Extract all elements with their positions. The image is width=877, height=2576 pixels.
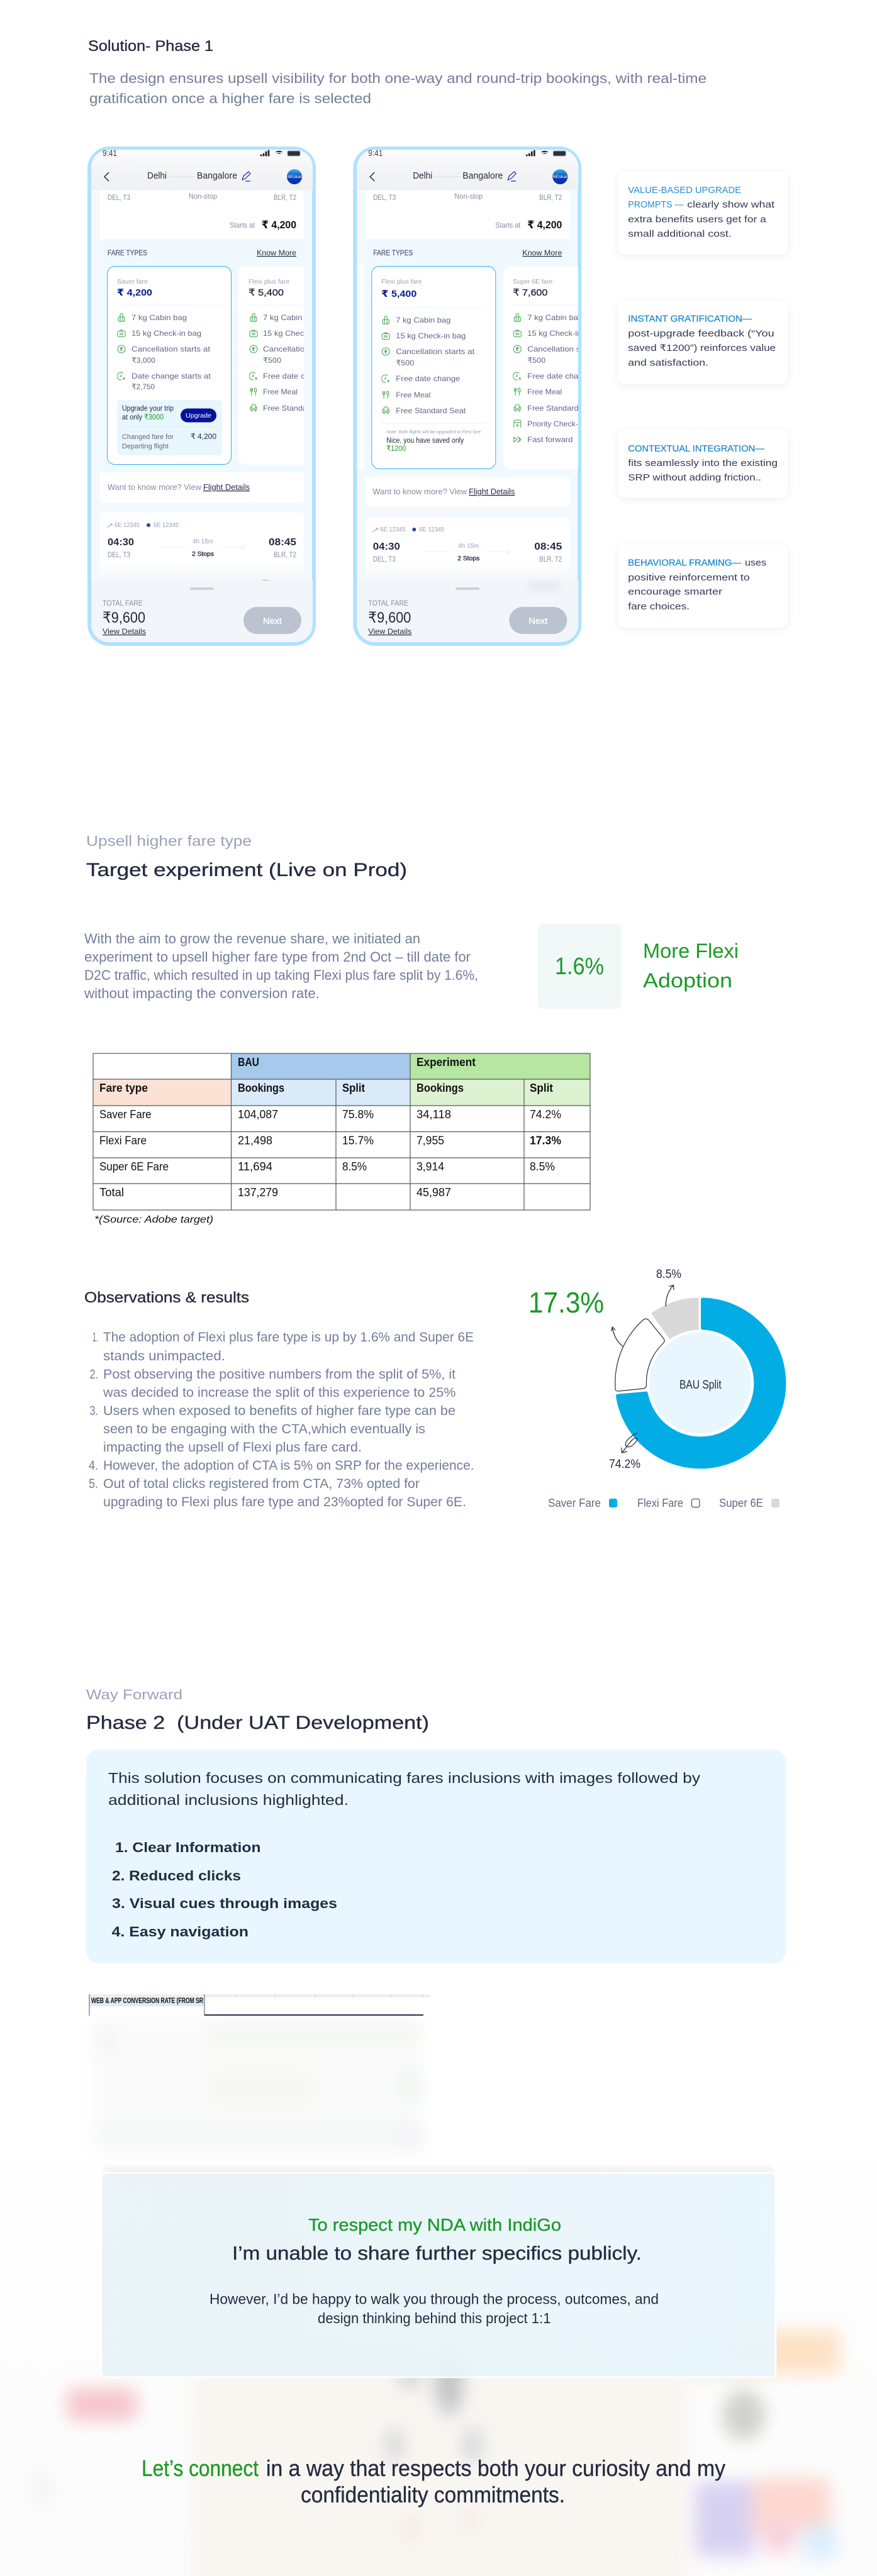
- fare card: saver: ₹2,750: [131, 382, 155, 391]
- NDA headline: To respect my NDA with IndiGo: [308, 2215, 561, 2235]
- fare card: super 6E (partly visible): Free date change: [527, 372, 593, 380]
- chart centre label: [649, 1332, 751, 1434]
- flight summary card: BLR, T2: [274, 193, 296, 202]
- numbered list: observations: 3.: [89, 1403, 98, 1418]
- phone header: 9:41: [103, 148, 117, 158]
- stat card: 1.6% more flexi adoption: 1.6%: [555, 953, 604, 980]
- table: BAU vs experiment fare split: Experiment: [416, 1056, 476, 1069]
- arrow: to flexi label: [612, 1327, 623, 1346]
- fare card: flexi plus (partly visible): Free Standard Seat: [263, 404, 333, 413]
- flight option card: 08:45: [534, 541, 562, 552]
- table: BAU vs experiment fare split: 8.5%: [342, 1160, 367, 1173]
- fare card: saver: ₹ 4,200: [117, 287, 152, 298]
- flight details link card: [100, 472, 304, 503]
- flight summary card: Starts at: [495, 221, 521, 230]
- flight summary card: Starts at: [230, 221, 255, 230]
- callout: behavioral framing: [618, 545, 788, 628]
- upgrade prompt: at only: [122, 414, 142, 421]
- callout: contextual integration: SRP without adding friction..: [628, 473, 761, 483]
- fare card: flexi plus selected: Flexi plus fare: [381, 278, 422, 286]
- text block: solution intro: gratification once a higher fare is selected: [89, 91, 371, 106]
- table: BAU vs experiment fare split: BAU: [238, 1056, 259, 1069]
- fare card: saver: Saver fare: [117, 278, 148, 286]
- fare card: flexi plus selected: [372, 267, 496, 469]
- fare card: saver: Cancellation starts at: [131, 345, 211, 353]
- phone header: Bangalore: [462, 170, 503, 181]
- callout: value-based upgrade prompts: PROMPTS —: [628, 200, 684, 210]
- upgrade prompt: Changed fare for: [122, 433, 174, 441]
- flight option card: 6E 12345: [154, 522, 179, 529]
- panel numbered list: 2. Reduced clicks: [112, 1868, 241, 1884]
- chart value: saver 74.2%: 74.2%: [609, 1458, 640, 1471]
- flight option card: 2 Stops: [192, 551, 214, 558]
- callout: value-based upgrade prompts: extra benefits users get for a: [628, 215, 767, 225]
- fare card: flexi plus (partly visible): ₹ 5,400: [249, 287, 284, 298]
- bottom sheet: total fare: TOTAL FARE: [103, 599, 143, 608]
- flight option card: 6E 12345: [380, 526, 406, 533]
- callout: behavioral framing: uses: [745, 558, 766, 569]
- table: BAU vs experiment fare split: 11,694: [238, 1160, 272, 1173]
- closing statement: confidentiality commitments.: [301, 2482, 565, 2507]
- table: conversion rate (mostly blurred): [89, 1994, 430, 2155]
- blurred table body: [94, 2020, 422, 2155]
- eyebrow: way forward: Way Forward: [86, 1687, 182, 1702]
- savings feedback: ₹1200: [386, 444, 406, 453]
- upgrade prompt: Departing flight: [122, 443, 169, 450]
- numbered list: observations: 5.: [89, 1476, 98, 1491]
- fare card: flexi plus (partly visible): Cancellation starts at: [263, 345, 342, 353]
- flight summary card: Non-stop: [189, 192, 217, 201]
- flight summary card: [100, 191, 304, 239]
- table: BAU vs experiment fare split: Fare type: [99, 1082, 148, 1094]
- fare types section: FARE TYPES: [373, 250, 413, 257]
- callout: value-based upgrade prompts: clearly show what: [687, 200, 774, 210]
- callout: instant gratification: post-upgrade feedback (“You: [628, 329, 774, 339]
- eyebrow: upsell higher fare type: Upsell higher fare type: [86, 833, 252, 849]
- phone mockup: flexi plus selected: [355, 148, 606, 644]
- fare card: flexi plus selected: ₹ 5,400: [381, 289, 416, 299]
- callout: instant gratification: [618, 301, 788, 384]
- table: BAU vs experiment fare split: 104,087: [238, 1108, 278, 1121]
- closing statement: Let’s connect: [142, 2455, 259, 2481]
- fare types section: FARE TYPES: [108, 250, 147, 257]
- panel description: additional inclusions highlighted.: [108, 1792, 349, 1808]
- table source note: *(Source: Adobe target): [94, 1214, 213, 1225]
- phone header: Bangalore: [197, 170, 237, 181]
- numbered list: observations: However, the adoption of CTA is 5% on SRP for the experience.: [103, 1458, 474, 1473]
- table: BAU vs experiment fare split: 74.2%: [530, 1108, 561, 1121]
- flight option card: 08:45: [269, 537, 296, 548]
- chart legend: Flexi Fare: [637, 1497, 683, 1509]
- table: BAU vs experiment fare split: 8.5%: [530, 1160, 555, 1173]
- NDA invitation: [209, 2290, 659, 2326]
- table: BAU vs experiment fare split: 15.7%: [342, 1135, 374, 1147]
- text block: experiment description: without impacting the conversion rate.: [84, 985, 320, 1001]
- fare card: flexi plus selected: Free Meal: [396, 391, 430, 399]
- fare card: flexi plus (partly visible): Free Meal: [263, 387, 298, 396]
- fare card: saver: 7 kg Cabin bag: [131, 313, 187, 322]
- NDA statement: I’m unable to share further specifics publicly.: [232, 2242, 642, 2264]
- panel shadow: [104, 2167, 773, 2175]
- fare card: flexi plus selected: Free Standard Seat: [396, 406, 466, 415]
- flight option card: 2 Stops: [457, 555, 479, 562]
- text block: experiment description: D2C traffic, which resulted in up taking Flexi plus fare split by 1.6%,: [84, 967, 478, 983]
- numbered list: observations: 4.: [89, 1458, 98, 1473]
- fare card: flexi plus selected: Free date change: [396, 374, 461, 383]
- flight summary card: ₹ 4,200: [527, 219, 562, 231]
- fare card: flexi plus selected: ₹500: [396, 358, 415, 367]
- callout: behavioral framing: fare choices.: [628, 602, 690, 612]
- fare card: flexi plus selected: 7 kg Cabin bag: [396, 316, 450, 325]
- fare card: flexi plus selected: Cancellation starts at: [396, 347, 475, 356]
- arrow: to super 6E label: [666, 1285, 674, 1306]
- bottom sheet: total fare: ₹9,600: [368, 609, 411, 626]
- numbered list: observations: 2.: [89, 1367, 98, 1382]
- table: BAU vs experiment fare split: Flexi Fare: [99, 1135, 147, 1147]
- bottom sheet: total fare: View Details: [103, 627, 146, 636]
- fare types section: Know More: [257, 250, 296, 257]
- phone header: [91, 148, 313, 190]
- background: blurred project image: [32, 2330, 840, 2576]
- flight option card: BLR, T2: [539, 555, 562, 564]
- fare card: super 6E (partly visible): ₹500: [527, 356, 546, 365]
- flight option card: 04:30: [373, 541, 400, 552]
- fare card: flexi plus (partly visible): 15 kg Check-in bag: [263, 329, 333, 338]
- fare types section: [107, 250, 304, 465]
- fare card: super 6E (partly visible): Free Standard Seat: [527, 404, 598, 413]
- callout: instant gratification: INSTANT GRATIFICATION—: [628, 314, 752, 325]
- upgrade prompt: ₹ 4,200: [191, 432, 216, 441]
- panel: NDA notice: [101, 2173, 776, 2377]
- fare types section: Know More: [522, 250, 562, 257]
- fare card: flexi plus (partly visible): 7 kg Cabin bag: [263, 313, 318, 322]
- callout: contextual integration: CONTEXTUAL INTEGRATION—: [628, 444, 764, 454]
- flight option card: 4h 15m: [193, 538, 213, 545]
- fare card: flexi plus selected: 15 kg Check-in bag: [396, 331, 466, 340]
- callout: behavioral framing: encourage smarter: [628, 587, 722, 597]
- closing statement: [142, 2455, 725, 2507]
- savings feedback: Nice, you have saved only: [386, 437, 464, 445]
- flight option card: ₹ 5,000: [262, 579, 296, 591]
- fare card: flexi plus (partly visible): ₹500: [263, 356, 281, 365]
- table: BAU vs experiment fare split: 137,279: [238, 1186, 278, 1199]
- table: BAU vs experiment fare split: [93, 1053, 590, 1210]
- bottom sheet: total fare: TOTAL FARE: [368, 599, 408, 608]
- callout: instant gratification: and satisfaction.: [628, 358, 708, 369]
- numbered list: observations: [89, 1330, 474, 1509]
- fare card: super 6E (partly visible): Cancellation starts at: [527, 345, 606, 353]
- fare card: flexi plus (partly visible): Flexi plus fare: [249, 278, 289, 286]
- segment: saver fare: [618, 1299, 784, 1467]
- panel numbered list: 1. Clear Information: [115, 1840, 260, 1855]
- callout: value-based upgrade prompts: [618, 172, 788, 255]
- numbered list: observations: stands unimpacted.: [103, 1348, 225, 1363]
- upgrade prompt: [117, 400, 222, 455]
- flight option card: [100, 513, 304, 591]
- segment: flexi fare: [615, 1319, 664, 1391]
- callout: value-based upgrade prompts: small additional cost.: [628, 229, 732, 239]
- chart centre label: BAU Split: [679, 1379, 722, 1392]
- bottom sheet: total fare: Next: [263, 616, 282, 626]
- bottom sheet: total fare: [91, 580, 313, 642]
- fare card: super 6E (partly visible): Free Meal: [527, 387, 562, 396]
- fare card: saver: Date change starts at: [131, 372, 211, 380]
- flight summary card: DEL, T3: [373, 193, 396, 202]
- numbered list: observations: Users when exposed to benefits of higher fare type can be: [103, 1403, 455, 1418]
- panel numbered list: 4. Easy navigation: [112, 1924, 249, 1940]
- panel: phase 2 summary: [86, 1750, 786, 1963]
- savings feedback: Note: Both flights will be upgraded to Flexi fare: [386, 429, 481, 435]
- numbered list: observations: Out of total clicks registered from CTA, 73% opted for: [103, 1476, 420, 1491]
- numbered list: observations: seen to be engaging with the CTA,which eventually is: [103, 1421, 425, 1436]
- segment: super 6E: [654, 1299, 697, 1337]
- chart legend: [548, 1497, 779, 1509]
- numbered list: observations: The adoption of Flexi plus fare type is up by 1.6% and Super 6E: [103, 1330, 474, 1345]
- flight summary card: DEL, T3: [108, 193, 130, 202]
- callout: contextual integration: fits seamlessly into the existing: [628, 458, 778, 469]
- NDA invitation: However, I’d be happy to walk you through the process, outcomes, and: [209, 2290, 659, 2307]
- phone header: Delhi: [147, 170, 167, 181]
- phone header: Delhi: [413, 170, 432, 181]
- upgrade prompt: Upgrade: [186, 412, 211, 419]
- heading: observations and results: Observations & results: [84, 1289, 249, 1306]
- chart legend: Super 6E: [719, 1497, 763, 1509]
- text block: solution intro: [89, 70, 707, 106]
- closing statement: in a way that respects both your curiosity and my: [266, 2455, 725, 2481]
- fare card: super 6E (partly visible): [503, 266, 578, 469]
- text block: experiment description: experiment to upsell higher fare type from 2nd Oct – till date for: [84, 949, 471, 965]
- panel numbered list: 3. Visual cues through images: [112, 1896, 337, 1911]
- chart value: super 6E 8.5%: 8.5%: [656, 1268, 681, 1281]
- fare card: super 6E (partly visible): 15 kg Check-in bag: [527, 329, 597, 338]
- fare card: super 6E (partly visible): Fast forward: [527, 435, 573, 444]
- numbered list: observations: impacting the upsell of Flexi plus fare card.: [103, 1440, 362, 1455]
- arrow: to saver label: [622, 1433, 637, 1453]
- table: BAU vs experiment fare split: 17.3%: [530, 1135, 561, 1147]
- background: page tint behind footer: [0, 2138, 877, 2576]
- numbered list: observations: 1.: [92, 1330, 98, 1345]
- text block: solution intro: The design ensures upsell visibility for both one-way and round-trip bookings, with real-time: [89, 70, 707, 86]
- flight summary card: BLR, T2: [539, 193, 562, 202]
- heading: Solution Phase 1: Solution- Phase 1: [88, 38, 213, 55]
- callout: behavioral framing: positive reinforcement to: [628, 573, 750, 583]
- table: BAU vs experiment fare split: Split: [530, 1082, 553, 1094]
- numbered list: observations: Post observing the positive numbers from the split of 5%, it: [103, 1367, 455, 1382]
- table: conversion rate (mostly blurred): WEB & APP CONVERSION RATE (FROM SR: [91, 1996, 203, 2005]
- flight summary card: [366, 191, 569, 239]
- bottom sheet: total fare: [357, 580, 578, 642]
- callout: instant gratification: saved ₹1200”) reinforces value: [628, 343, 776, 353]
- flight option card: DEL, T3: [373, 555, 396, 564]
- stat card: 1.6% more flexi adoption: Adoption: [643, 969, 732, 992]
- table: BAU vs experiment fare split: 21,498: [238, 1135, 272, 1147]
- bottom sheet: total fare: View Details: [368, 627, 411, 636]
- panel numbered list: [112, 1840, 337, 1940]
- fare card: super 6E (partly visible): 7 kg Cabin bag: [527, 313, 583, 322]
- stat card: 1.6% more flexi adoption: [538, 924, 739, 1009]
- NDA invitation: design thinking behind this project 1:1: [318, 2310, 551, 2326]
- text block: experiment description: [84, 931, 478, 1001]
- flight details link card: Want to know more? View: [372, 487, 467, 496]
- fare card: flexi plus (partly visible): Free date change: [263, 372, 328, 380]
- phone header: 6Eskai: [553, 175, 567, 179]
- fare card: saver: ₹3,000: [131, 356, 155, 365]
- flight details link card: [366, 477, 569, 507]
- flight details link card: Want to know more? View: [108, 483, 202, 492]
- numbered list: observations: was decided to increase the split of this experience to 25%: [103, 1385, 455, 1400]
- text block: experiment description: With the aim to grow the revenue share, we initiated an: [84, 931, 420, 947]
- numbered list: observations: upgrading to Flexi plus fare type and 23%opted for Super 6E.: [103, 1494, 466, 1509]
- panel description: This solution focuses on communicating fares inclusions with images followed by: [108, 1770, 701, 1786]
- table: BAU vs experiment fare split: Total: [99, 1186, 124, 1199]
- heading: target experiment: Target experiment (Live on Prod): [86, 860, 407, 880]
- table: BAU vs experiment fare split: Saver Fare: [99, 1108, 152, 1121]
- fare card: super 6E (partly visible): ₹ 7,600: [513, 287, 547, 298]
- bottom sheet: total fare: Next: [528, 616, 547, 626]
- flight option card: 6E 12345: [419, 526, 445, 533]
- table: BAU vs experiment fare split: Bookings: [238, 1082, 284, 1094]
- callout: contextual integration: [618, 430, 788, 498]
- flight details link card: Flight Details: [203, 483, 250, 492]
- phone header: 6Eskai: [288, 175, 301, 179]
- table: BAU vs experiment fare split: 45,987: [416, 1186, 451, 1199]
- table: BAU vs experiment fare split: Bookings: [416, 1082, 464, 1094]
- fare types section: [357, 250, 578, 469]
- fare card: super 6E (partly visible): Priority Check-in: [527, 419, 584, 428]
- fare card: saver: 15 kg Check-in bag: [131, 329, 201, 338]
- table: BAU vs experiment fare split: Split: [342, 1082, 365, 1094]
- upgrade prompt: ₹3000: [144, 413, 164, 421]
- table: BAU vs experiment fare split: Super 6E Fare: [99, 1160, 169, 1173]
- table: BAU vs experiment fare split: 34,118: [416, 1108, 451, 1121]
- table: BAU vs experiment fare split: 75.8%: [342, 1108, 374, 1121]
- flight option card: 4h 15m: [458, 543, 479, 550]
- panel description: [108, 1770, 701, 1808]
- chart legend: Saver Fare: [548, 1497, 601, 1509]
- callout: value-based upgrade prompts: VALUE-BASED UPGRADE: [628, 186, 741, 196]
- upgrade prompt: Upgrade your trip: [122, 405, 174, 413]
- flight details link card: Flight Details: [469, 487, 515, 496]
- fare card: saver: [107, 267, 232, 464]
- flight summary card: Non-stop: [454, 192, 483, 201]
- flight option card: BLR, T2: [274, 550, 296, 559]
- flight option card: [366, 517, 569, 580]
- flight summary card: ₹ 4,200: [262, 219, 296, 231]
- donut chart: BAU split: [615, 1299, 784, 1467]
- savings feedback: [386, 429, 481, 453]
- callout: behavioral framing: BEHAVIORAL FRAMING—: [628, 558, 741, 569]
- table: BAU vs experiment fare split: 3,914: [416, 1160, 444, 1173]
- stat card: 1.6% more flexi adoption: More Flexi: [643, 940, 739, 962]
- phone header: [357, 148, 578, 190]
- phone mockup: saver fare selected: [89, 148, 342, 644]
- bottom sheet: total fare: ₹9,600: [103, 609, 145, 626]
- phone header: 9:41: [368, 148, 383, 158]
- chart value: flexi 17.3%: 17.3%: [528, 1286, 604, 1319]
- heading: phase 2: Phase 2 (Under UAT Development): [86, 1713, 429, 1733]
- flight option card: DEL, T3: [108, 550, 130, 559]
- flight option card: 6E 12345: [115, 522, 140, 529]
- table: BAU vs experiment fare split: 7,955: [416, 1135, 444, 1147]
- fare card: super 6E (partly visible): Super 6E fare: [513, 278, 552, 286]
- flight option card: 04:30: [108, 537, 134, 548]
- fare card: flexi plus (partly visible): [238, 266, 304, 465]
